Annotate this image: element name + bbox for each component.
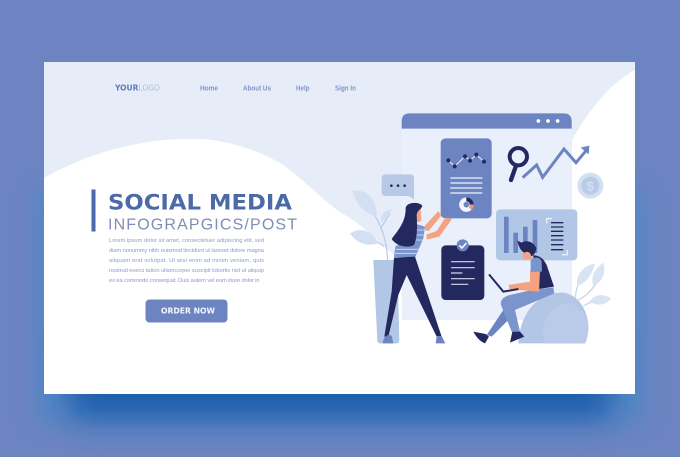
body text [109,238,265,284]
title accent bar [92,190,96,232]
woman shirt [394,224,425,257]
browser title bar [402,113,572,129]
body text: nostrud exerci tation ullamcorper suscipit lobortis nisl ut aliquip [109,268,264,274]
body text: ex ea commodo consequat. Duis autem vel eum iriure dolor in [109,278,260,284]
man backpack [533,255,554,289]
man hair [517,241,536,256]
woman [383,203,452,343]
navigation: Sign In [335,84,356,92]
illustration [350,113,611,343]
woman shoes [383,335,445,343]
growth arrow [523,146,589,178]
right plant [575,263,611,306]
subtitle: INFOGRAPGICS/POST [108,216,297,234]
navigation [200,84,356,92]
man [473,241,554,343]
button [146,300,228,322]
body text: Lorem ipsum dolor sit amet, consectetuer adipiscing elit, sed [109,238,264,244]
logo: YOURLOGO [114,84,160,92]
report card [441,138,492,218]
card side glow [36,190,644,422]
man near leg [501,287,554,332]
clipboard [441,239,484,300]
navigation: Help [296,84,310,92]
plant pot [373,260,399,343]
magnifier icon [510,148,527,180]
rock seat [518,293,588,343]
navigation: Home [200,84,218,92]
navigation: About Us [243,84,271,92]
man shoes [473,332,524,343]
woman head [413,208,421,223]
woman arms [425,211,452,240]
man head [522,250,533,259]
card shadow [70,350,610,418]
bar chart card [496,209,577,260]
man far leg [487,305,515,337]
speech bubble [382,174,414,199]
left plant [350,190,392,260]
woman trousers [384,257,442,337]
coin icon: $ [587,179,594,193]
man sleeve [531,258,542,272]
button: ORDER NOW [161,306,215,316]
coin icon [577,173,603,199]
man arm [508,271,540,292]
body text: diam nonummy nibh euismod tincidunt ut laoreet dolore magna [109,248,265,254]
background wave [44,62,635,320]
title: SOCIAL MEDIA [108,190,293,214]
laptop [489,274,518,292]
browser window body [402,120,572,320]
panel: landing page card [44,62,635,394]
body text: aliquam erat volutpat. Ut wisi enim ad minim veniam, quis [109,258,264,264]
woman hair [392,203,422,247]
